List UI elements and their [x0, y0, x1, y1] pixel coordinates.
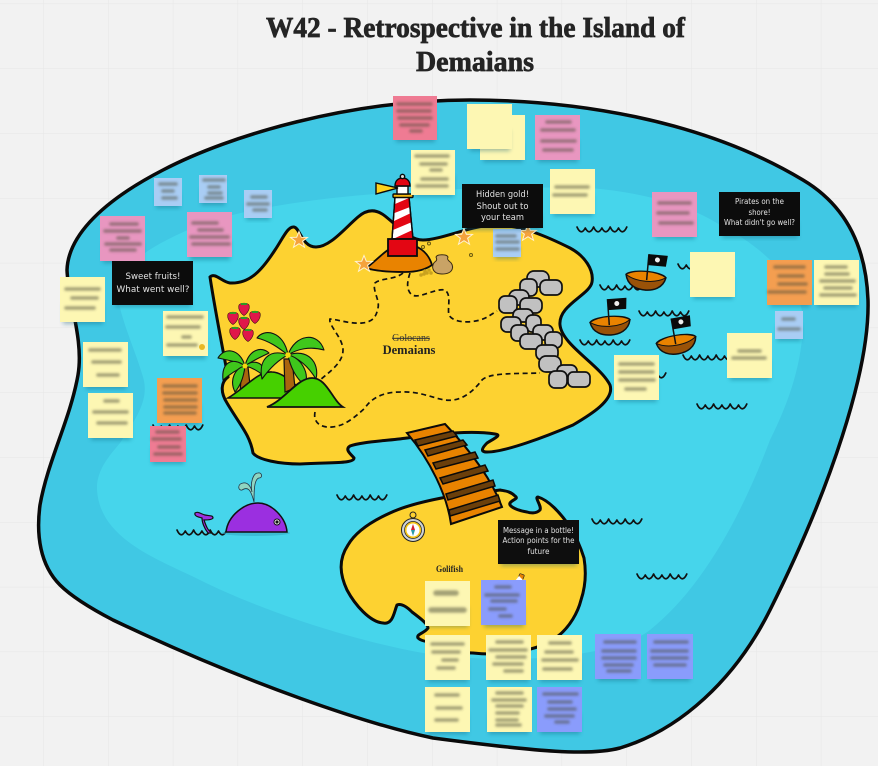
bridge [407, 424, 502, 524]
sticky notes: top cluster [393, 96, 697, 259]
message bottle [515, 573, 525, 581]
treasure bag and coins [419, 242, 472, 277]
map labels: Demaians [383, 343, 436, 357]
compass [402, 512, 424, 542]
pirate boat 2 [589, 298, 631, 336]
waves [153, 227, 747, 579]
callout: what didn't go well: shore! [748, 208, 770, 217]
map labels: Golocans [392, 333, 430, 344]
callout: hidden gold: Shout out to [476, 202, 529, 212]
palm trees and hills [218, 333, 343, 407]
starfish [290, 224, 536, 271]
callout: what didn't go well: Pirates on the [735, 197, 784, 206]
title: Demaians [416, 47, 534, 78]
lighthouse [366, 174, 432, 272]
callout: action points [498, 520, 579, 566]
main island: Demaians [210, 211, 611, 464]
callout: hidden gold: Hidden gold! [476, 190, 529, 200]
map labels [383, 333, 464, 575]
sticky notes: bottom cluster [425, 580, 693, 734]
sea: lighter inner water [97, 187, 803, 659]
tower [388, 174, 417, 256]
callout: what didn't go well: What didn't go well? [724, 218, 795, 227]
mound [366, 246, 432, 272]
treasure trails [315, 273, 540, 427]
callout: what didn't go well [719, 192, 800, 238]
pirate boat 1 [625, 252, 668, 292]
title: W42 - Retrospective in the Island of [266, 13, 686, 44]
whale [195, 473, 290, 536]
callout: what went well: Sweet fruits! [126, 272, 180, 282]
callout: hidden gold: your team [481, 213, 524, 223]
sticky notes: left cluster [60, 175, 272, 464]
map labels: Golifish [436, 565, 464, 575]
callout: hidden gold [462, 184, 543, 230]
callout: what went well: What went well? [116, 285, 190, 295]
rocks [499, 271, 590, 388]
pirate boat 3 [652, 315, 698, 357]
callout: what went well [112, 261, 193, 307]
title [266, 13, 686, 78]
callout: action points: Message in a bottle! [503, 526, 574, 535]
callout: action points: future [528, 547, 550, 556]
callout: action points: Action points for the [502, 536, 575, 545]
sticky notes: right cluster [614, 252, 859, 402]
lower island: Golifish [341, 490, 585, 654]
strawberries [228, 303, 260, 342]
